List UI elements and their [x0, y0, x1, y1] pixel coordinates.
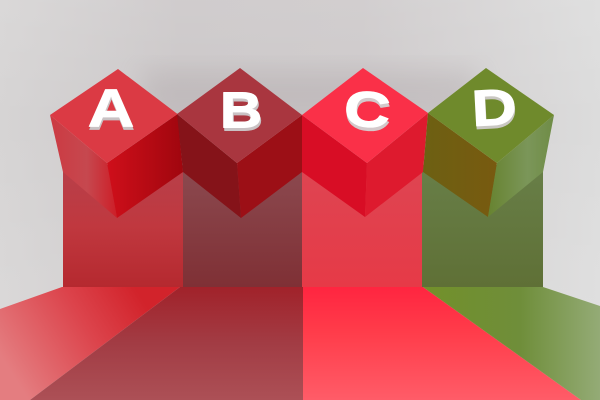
wall reflection panels [63, 165, 543, 287]
floor bands [0, 287, 600, 400]
letter D: D [471, 82, 519, 141]
letter C: C [343, 84, 393, 143]
letter B: B [220, 81, 262, 139]
letter A: A [88, 81, 135, 141]
letter A: A [88, 78, 134, 138]
cube A [50, 69, 183, 218]
letter D: D [470, 79, 518, 138]
cube B [177, 68, 302, 218]
cube D [423, 68, 554, 217]
letter C: C [342, 81, 392, 139]
cube C [302, 68, 428, 217]
letter B: B [221, 84, 263, 142]
